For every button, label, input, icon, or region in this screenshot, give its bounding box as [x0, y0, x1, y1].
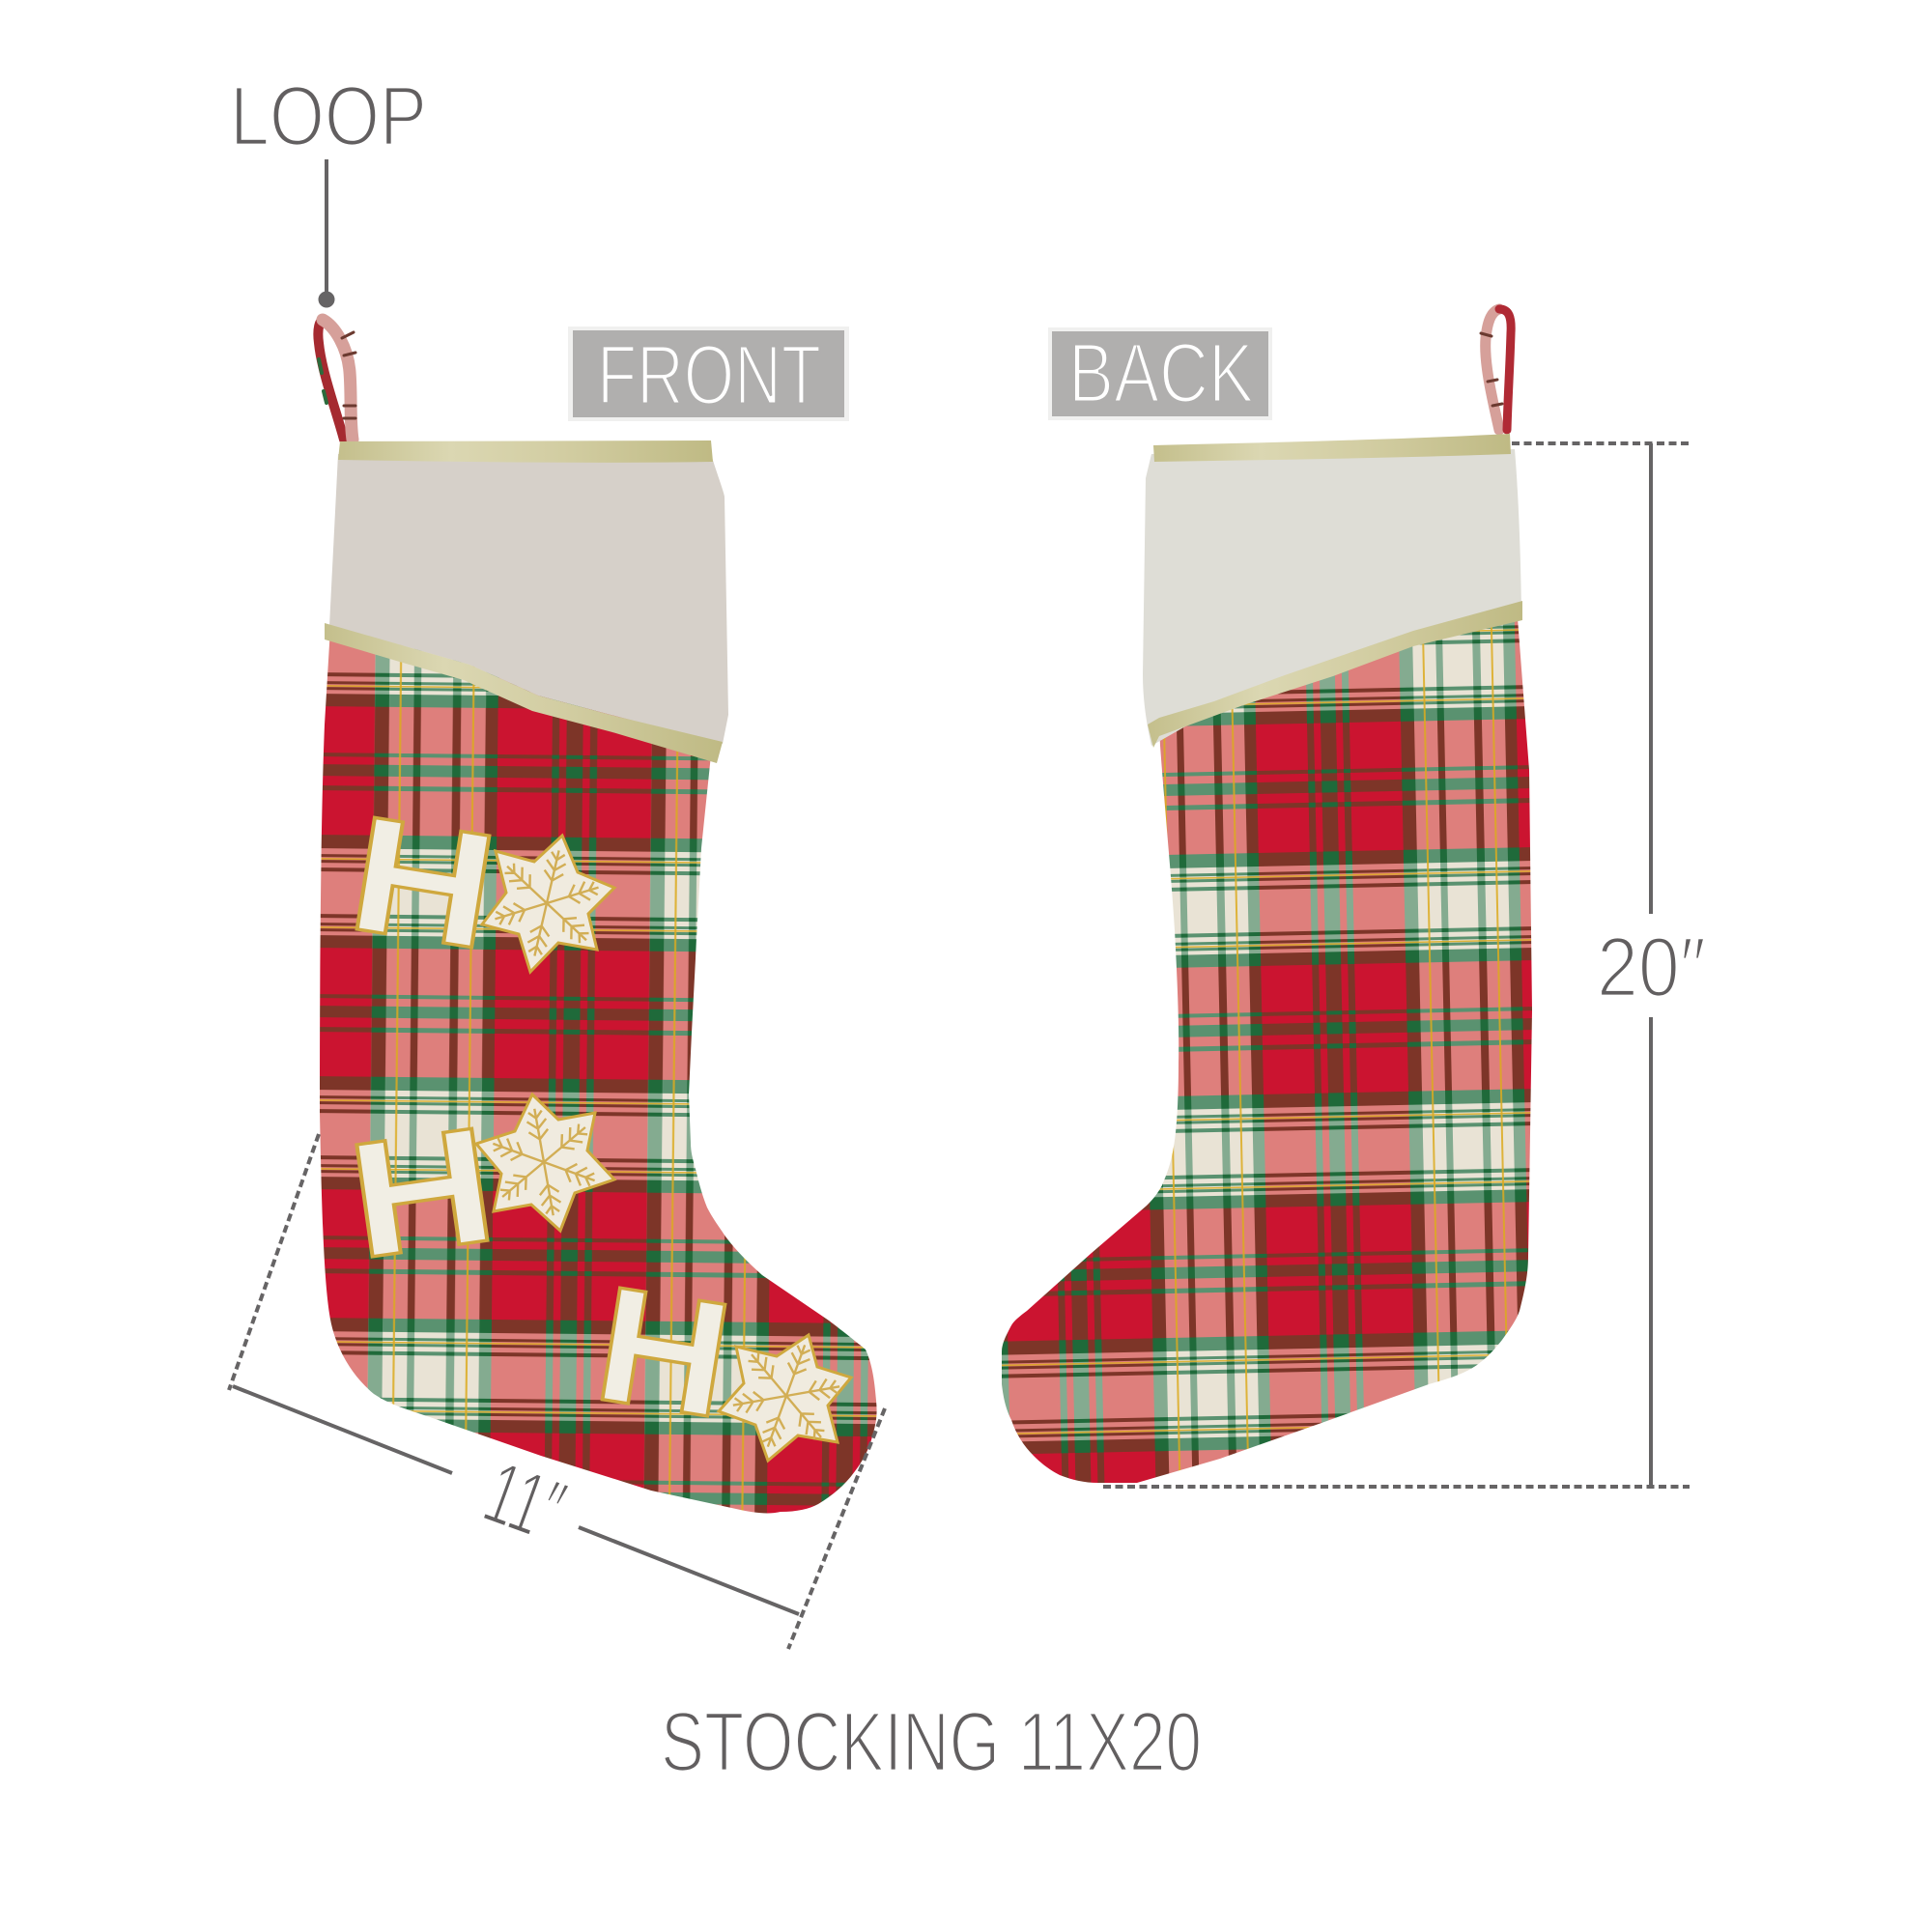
back hanging loop	[1481, 309, 1511, 430]
front cuff diagonal trim	[325, 623, 723, 763]
back cuff diagonal trim	[1148, 601, 1522, 748]
front cuff top trim	[338, 440, 713, 463]
HO patch 1: H	[339, 781, 508, 984]
back stocking	[1002, 309, 1532, 1483]
20 inch value: 20″	[1597, 921, 1706, 1014]
HO patch 2: H	[339, 1092, 505, 1293]
HO patch 1	[339, 781, 614, 984]
label: LOOP: LOOP	[230, 70, 427, 163]
front plaid body	[320, 628, 877, 1513]
dimension: 11 inch width	[229, 1134, 885, 1649]
back label: BACK: BACK	[1068, 327, 1254, 420]
front label: FRONT: FRONT	[597, 328, 821, 422]
front stocking	[318, 320, 877, 1513]
11 inch value: 11″	[472, 1443, 577, 1561]
front hanging loop	[318, 320, 355, 440]
front cuff	[329, 454, 728, 744]
loop callout line and dot	[319, 159, 334, 307]
HO patch 3: H	[585, 1251, 743, 1453]
HO patch 2	[339, 1092, 614, 1293]
back plaid body	[1002, 618, 1532, 1483]
HO patch 3	[585, 1251, 853, 1464]
back cuff top trim	[1153, 434, 1511, 462]
back cuff	[1143, 449, 1521, 746]
caption: STOCKING 11X20: STOCKING 11X20	[661, 1695, 1202, 1789]
